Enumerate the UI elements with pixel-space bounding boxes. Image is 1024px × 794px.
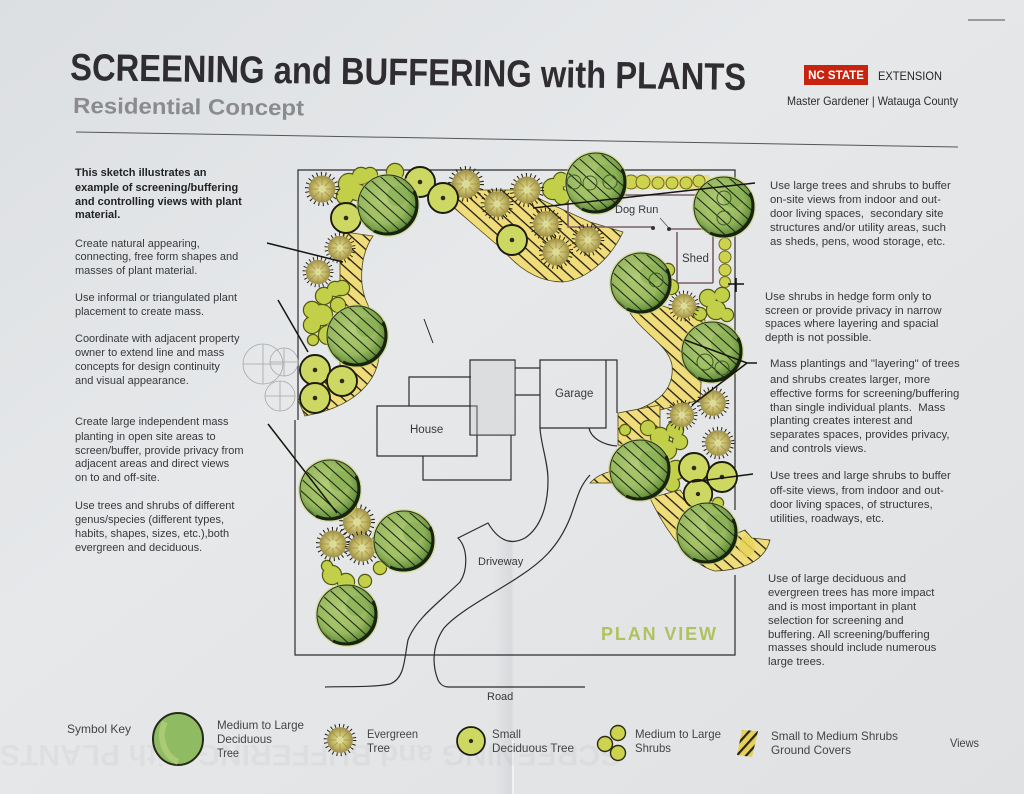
note: hedge form: Use shrubs in hedge form only to [765,291,931,303]
hedge shrubs [624,175,731,288]
key: evergreen tree [326,726,418,755]
note: large trees: Use of large deciduous and [768,573,906,585]
key: medium to large shrubs: Medium to Large [635,727,721,741]
note: plant diversity: genus/species (different types, [75,514,224,526]
note: large trees: and is most important in plant [768,601,917,613]
note: hedge form: spaces where layering and spacial [765,318,938,330]
logo: NC State Extension [804,65,942,85]
note: coordinate with neighbors: Coordinate with adjacent property [75,333,240,345]
note: plant diversity: habits, shapes, sizes, etc.),both [75,528,229,540]
key heading: Symbol Key [67,722,131,736]
note: hedge form [765,291,942,344]
note: off-site views: utilities, roadways, etc. [770,513,884,525]
driveway [325,428,590,687]
logo: NC State Extension: NC STATE [808,70,864,82]
medium to large deciduous trees [298,151,756,647]
note: independent mass planting: on to and off-site. [75,472,160,484]
title: SCREENING and BUFFERING with PLANTS [70,47,746,99]
note: layering: effective forms for screening/buffering [770,388,959,400]
note: informal placement: placement to create mass. [75,306,204,318]
note: on-site views [770,180,951,248]
note: on-site views: Use large trees and shrubs to buffer [770,180,951,192]
note: plant diversity [75,500,234,554]
key: medium to large deciduous tree [153,713,304,765]
note: independent mass planting: adjacent areas and direct views [75,458,230,470]
left text column [75,167,244,554]
note: off-site views: off-site views, from indoor and out- [770,485,944,497]
intro text [75,167,242,221]
shrub masses [304,164,733,590]
note: natural shapes: connecting, free form shapes and [75,251,238,263]
key: small deciduous tree: Deciduous Tree [492,741,574,755]
note: on-site views: as sheds, pens, wood storage, etc. [770,236,945,248]
plan labels: House [410,424,443,436]
key: small shrubs and ground covers [737,729,898,757]
plan view drawing [243,151,770,703]
key: medium to large shrubs [598,726,721,760]
house and garage outlines [377,360,617,480]
note: layering [770,358,960,455]
key: small shrubs and ground covers: Small to Medium Shrubs [771,729,898,743]
view leader lines [267,183,757,513]
evergreen trees [304,168,732,563]
key: views: Views [950,736,979,750]
logo: NC State Extension: EXTENSION [878,69,942,83]
plan labels: Dog Run [615,204,658,216]
note: independent mass planting: Create large independent mass [75,416,229,428]
neighbour trees faint outline [243,344,298,411]
key: evergreen tree: Tree [367,741,390,755]
note: large trees: evergreen trees has more impact [768,587,935,599]
right text column [765,180,960,668]
note: large trees: buffering. All screening/buffering [768,629,930,641]
intro text: and controlling views with plant [75,196,242,208]
key: medium to large deciduous tree: Deciduous [217,732,272,746]
intro text: material. [75,209,120,221]
plan labels [410,204,709,703]
note: coordinate with neighbors: concepts for design continuity [75,361,220,373]
note: layering: separates spaces, provides privacy, [770,429,949,441]
note: independent mass planting: screen/buffer, provide privacy from [75,445,244,457]
key: small shrubs and ground covers: Ground Covers [771,743,851,757]
note: large trees [768,573,937,668]
note: large trees: masses should include numerous [768,642,937,654]
note: coordinate with neighbors: and visual appearance. [75,375,189,387]
note: large trees: large trees. [768,656,825,668]
note: layering: planting creates interest and [770,415,913,427]
plan labels: Garage [555,388,593,400]
note: layering: and shrubs creates larger, more [770,374,930,386]
note: independent mass planting [75,416,244,484]
key: small deciduous tree [457,727,574,755]
plan labels: Driveway [478,556,524,568]
note: on-site views: on-site views from indoor and out- [770,194,941,206]
note: hedge form: screen or provide privacy in narrow [765,305,942,317]
small deciduous trees [300,167,737,508]
note: coordinate with neighbors: owner to extend line and mass [75,347,225,359]
organisation name: Master Gardener | Watauga County [787,94,958,108]
note: natural shapes: Create natural appearing, [75,238,200,250]
note: off-site views: door living spaces, of structures, [770,499,933,511]
note: off-site views: Use trees and large shrubs to buffer [770,470,951,482]
key: small deciduous tree: Small [492,727,521,741]
note: informal placement: Use informal or triangulated plant [75,292,237,304]
note: large trees: selection for screening and [768,615,904,627]
subtitle: Residential Concept [73,93,305,120]
note: plant diversity: Use trees and shrubs of different [75,500,234,512]
text: SCREENING and BUFFERING with PLANTS [0,738,620,771]
shrubs inside tree canopies [567,175,731,375]
note: hedge form: depth is not possible. [765,332,872,344]
plan view label: PLAN VIEW [601,624,716,644]
intro text: This sketch illustrates an [75,167,207,179]
plan labels: Road [487,691,513,703]
note: off-site views [770,470,951,525]
note: on-site views: structures and/or utility areas, such [770,222,946,234]
note: on-site views: door living spaces, secondary site [770,208,943,220]
key: medium to large deciduous tree: Medium to Large [217,718,304,732]
symbol key [67,713,979,765]
note: layering: and controls views. [770,443,866,455]
note: natural shapes [75,238,238,277]
key: medium to large deciduous tree: Tree [217,746,239,760]
note: layering: Mass plantings and "layering" of trees [770,358,960,370]
note: coordinate with neighbors [75,333,240,387]
note: informal placement [75,292,237,318]
note: plant diversity: evergreen and deciduous. [75,542,202,554]
dog run and shed fences [568,193,713,283]
note: natural shapes: masses of plant material. [75,265,197,277]
ground cover hatch areas [298,190,770,571]
note: independent mass planting: planting in open site areas to [75,431,216,443]
property boundary [295,170,735,655]
key: medium to large shrubs: Shrubs [635,741,671,755]
note: layering: than single individual plants. Mass [770,402,946,414]
intro text: example of screening/buffering [75,182,238,194]
key: evergreen tree: Evergreen [367,727,418,741]
plan labels: Shed [682,253,709,265]
